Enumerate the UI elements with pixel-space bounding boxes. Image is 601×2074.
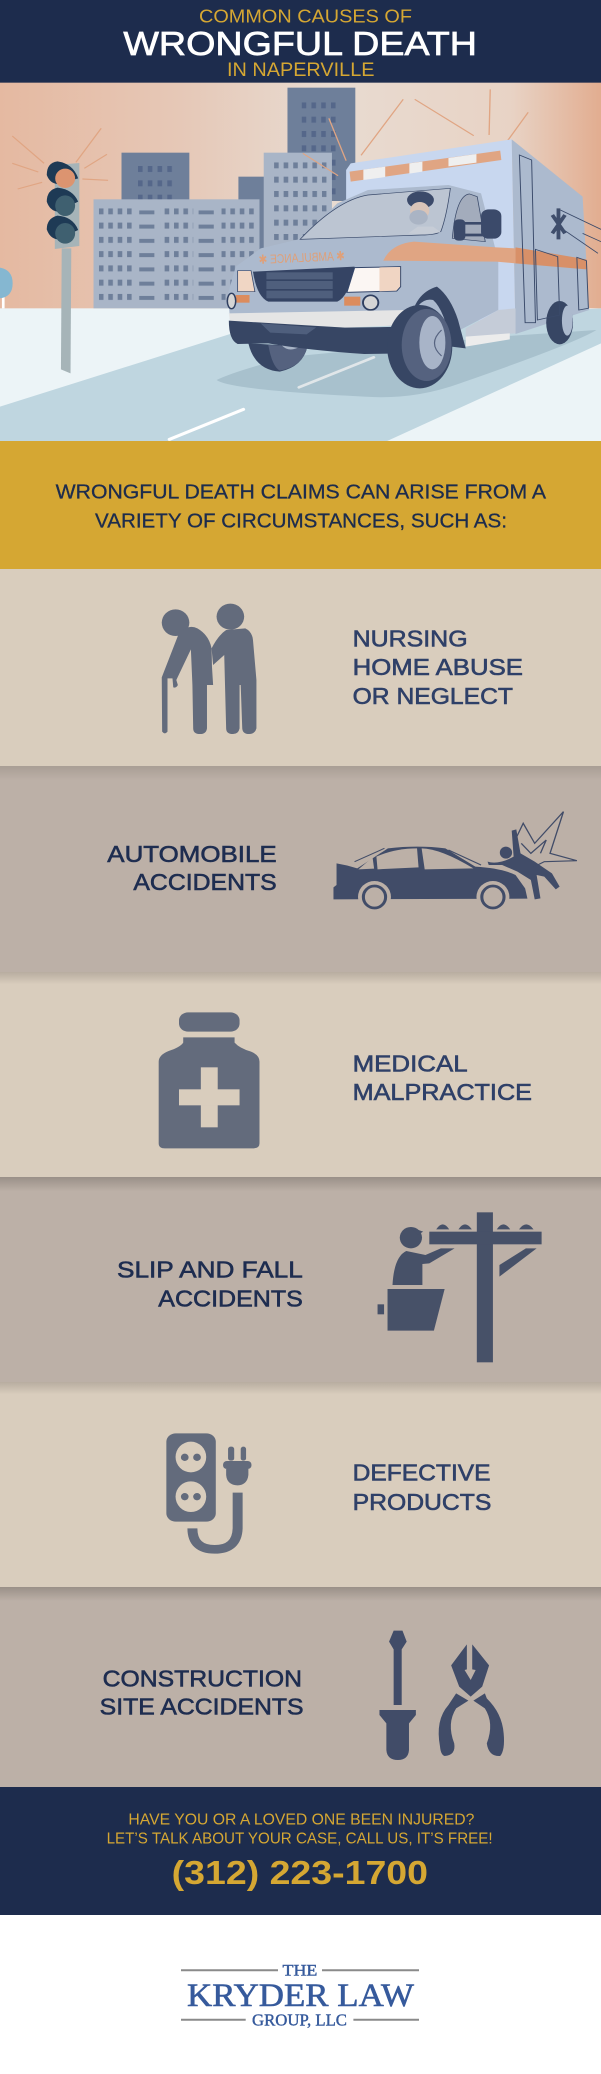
label: defective products (353, 1460, 491, 1515)
icon: power strip and plug (166, 1433, 251, 1549)
headlights (238, 267, 401, 292)
icon: medicine bottle (159, 1012, 259, 1148)
icon: screwdriver and pliers (379, 1631, 504, 1760)
label: construction site accidents: CONSTRUCTION (103, 1666, 302, 1692)
cta line two: LET’S TALK ABOUT YOUR CASE, CALL US, IT’S FREE! (107, 1830, 493, 1847)
label: construction site accidents: SITE ACCIDENTS (100, 1694, 304, 1720)
intro line one: WRONGFUL DEATH CLAIMS CAN ARISE FROM A (56, 481, 547, 503)
label: automobile accidents: AUTOMOBILE (107, 841, 277, 867)
title line: common causes of: COMMON CAUSES OF (199, 6, 412, 27)
ambulance (227, 139, 601, 388)
rear wheel (546, 301, 573, 344)
label: automobile accidents: ACCIDENTS (133, 869, 277, 895)
title line: in naperville: IN NAPERVILLE (227, 60, 374, 81)
label: medical malpractice (353, 1051, 532, 1105)
windshield (300, 188, 450, 239)
panel: slip and fall accidents (0, 1177, 601, 1382)
icon: worker at utility pole (378, 1212, 542, 1362)
label: nursing home abuse or neglect (353, 626, 523, 709)
panel: construction site accidents (0, 1587, 601, 1787)
tree (0, 268, 13, 308)
grille (253, 267, 355, 302)
logo: the kryder law group (181, 1963, 419, 2030)
phone number: (312) 223-1700 (172, 1854, 428, 1891)
label: slip and fall accidents (117, 1257, 303, 1312)
label: slip and fall accidents: ACCIDENTS (158, 1286, 303, 1312)
road (0, 308, 601, 441)
ambulance box (346, 139, 516, 333)
label: nursing home abuse or neglect: NURSING (353, 626, 468, 652)
city buildings (94, 88, 355, 308)
hero illustration: ambulance on city street (0, 83, 601, 441)
icon: elderly person and helper (162, 604, 256, 734)
side window and mirror (452, 194, 501, 242)
lane markings (169, 357, 374, 439)
turn signals and fog lamps (227, 293, 378, 310)
label: medical malpractice: MALPRACTICE (353, 1079, 532, 1105)
panel: automobile accidents (0, 766, 601, 972)
driver (407, 191, 441, 234)
call to action footer (0, 1787, 601, 1915)
cta line one: HAVE YOU OR A LOVED ONE BEEN INJURED? (128, 1811, 474, 1828)
hood lettering: ✱ AMBULANCE ✱ (258, 249, 345, 267)
panel: defective products (0, 1382, 601, 1587)
label: defective products: PRODUCTS (353, 1489, 491, 1515)
logo word: kryder law: KRYDER LAW (187, 1978, 415, 2014)
logo word: the: THE (282, 1963, 317, 1980)
label: defective products: DEFECTIVE (353, 1460, 491, 1486)
front wheel left (248, 343, 307, 372)
wheel arch (410, 287, 466, 348)
label: medical malpractice: MEDICAL (353, 1051, 468, 1077)
side doors (519, 155, 601, 323)
title header panel (0, 0, 601, 83)
logo word: group llc: GROUP, LLC (252, 2011, 347, 2030)
ground (0, 308, 601, 441)
ambulance shadow (217, 330, 596, 397)
orange stripe (383, 242, 516, 263)
bumper (229, 310, 409, 354)
roof lights (350, 151, 501, 182)
label: automobile accidents (107, 841, 277, 895)
traffic light (47, 161, 79, 373)
lower body and step (466, 308, 516, 347)
panel: medical malpractice (0, 972, 601, 1177)
warning light rays (12, 89, 528, 189)
rear stripe (516, 247, 586, 269)
label: nursing home abuse or neglect: HOME ABUSE (353, 654, 523, 680)
intro line two: VARIETY OF CIRCUMSTANCES, SUCH AS: (95, 510, 507, 532)
label: nursing home abuse or neglect: OR NEGLECT (353, 683, 513, 709)
sky (0, 83, 601, 309)
label: construction site accidents (100, 1666, 304, 1720)
title line: wrongful death: WRONGFUL DEATH (123, 25, 477, 62)
star of life (552, 208, 565, 239)
panel: nursing home abuse (0, 569, 601, 766)
label: slip and fall accidents: SLIP AND FALL (117, 1257, 303, 1283)
intro band (0, 441, 601, 569)
icon: car hitting pedestrian (333, 812, 577, 913)
main front wheel (387, 305, 452, 388)
cab body (228, 185, 498, 330)
